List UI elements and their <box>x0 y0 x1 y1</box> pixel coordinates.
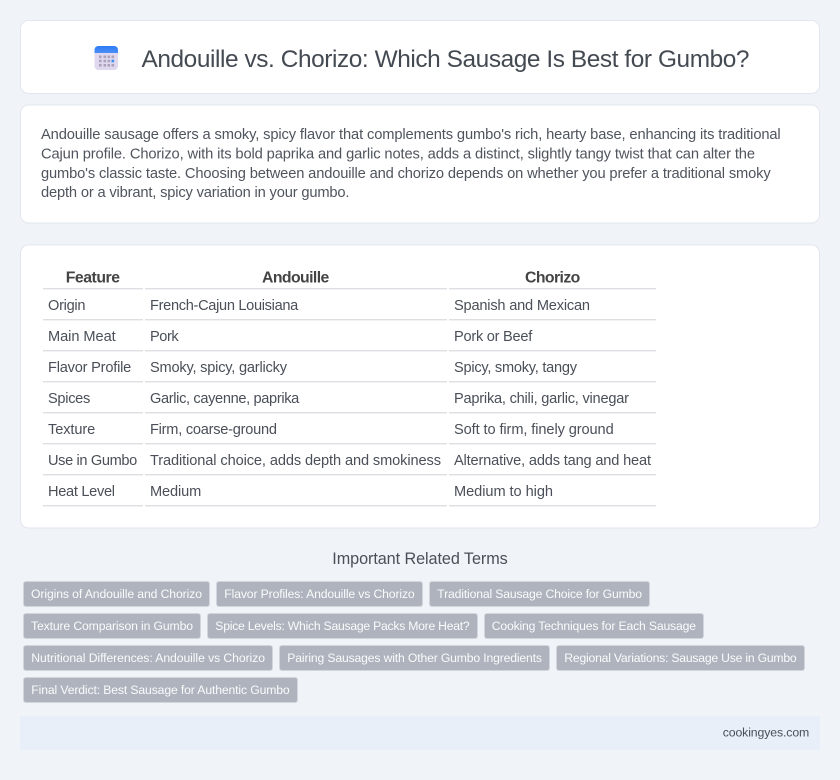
tag: Final Verdict: Best Sausage for Authentic Gumbo <box>31 683 290 697</box>
row: texture: Firm, coarse-ground <box>150 422 277 438</box>
icon: calendar <box>94 46 118 70</box>
tag: Origins of Andouille and Chorizo <box>31 587 202 601</box>
panel: comparison table <box>20 245 820 528</box>
heading: important related terms: Important Related Terms <box>332 550 508 568</box>
row: spices: Garlic, cayenne, paprika <box>150 391 300 407</box>
footer <box>20 716 820 750</box>
tag <box>24 678 298 702</box>
row: heat level <box>43 484 656 506</box>
row: spices: Spices <box>48 391 90 407</box>
footer source text: cookingyes.com <box>723 726 809 740</box>
panel: intro <box>20 105 820 223</box>
row: main meat: Pork <box>150 329 179 345</box>
row: texture <box>43 422 656 444</box>
tag <box>216 582 422 606</box>
tag <box>24 614 200 638</box>
tag: Nutritional Differences: Andouille vs Chorizo <box>31 651 265 665</box>
row: use in gumbo: Alternative, adds tang and heat <box>454 453 651 469</box>
tag <box>208 614 478 638</box>
table header row: Chorizo <box>525 270 581 286</box>
table header row: Andouille <box>262 270 330 286</box>
row: texture: Texture <box>48 422 95 438</box>
row: origin: Spanish and Mexican <box>454 298 590 314</box>
tag: Regional Variations: Sausage Use in Gumbo <box>564 651 797 665</box>
tag: Pairing Sausages with Other Gumbo Ingredients <box>287 651 542 665</box>
row: main meat: Main Meat <box>48 329 116 345</box>
intro paragraph <box>41 127 781 201</box>
tag <box>484 614 704 638</box>
row: flavor profile: Flavor Profile <box>48 360 131 376</box>
intro paragraph: Andouille sausage offers a smoky, spicy flavor that complements gumbo's rich, hearty base, enhancing its traditional <box>41 127 781 143</box>
row: main meat <box>43 329 656 351</box>
row: flavor profile <box>43 360 656 382</box>
row: use in gumbo: Traditional choice, adds depth and smokiness <box>150 453 441 469</box>
tag <box>556 646 804 670</box>
panel: related term tags <box>24 582 804 702</box>
tag: Traditional Sausage Choice for Gumbo <box>437 587 642 601</box>
tag <box>280 646 550 670</box>
row: main meat: Pork or Beef <box>454 329 533 345</box>
tag: Spice Levels: Which Sausage Packs More Heat? <box>215 619 470 633</box>
tag: Texture Comparison in Gumbo <box>31 619 193 633</box>
intro paragraph: Cajun profile. Chorizo, with its bold paprika and garlic notes, adds a distinct, slightly tangy twist that can alter the <box>41 146 755 162</box>
row: heat level: Medium <box>150 484 201 500</box>
row: texture: Soft to firm, finely ground <box>454 422 614 438</box>
intro paragraph: gumbo's classic taste. Choosing between andouille and chorizo depends on whether you prefer a traditional smoky <box>41 166 771 182</box>
row: origin: French-Cajun Louisiana <box>150 298 299 314</box>
tag <box>24 646 272 670</box>
intro paragraph: depth or a vibrant, spicy variation in your gumbo. <box>41 185 350 201</box>
row: use in gumbo <box>43 453 656 475</box>
row: heat level: Medium to high <box>454 484 553 500</box>
row: use in gumbo: Use in Gumbo <box>48 453 137 469</box>
row: flavor profile: Spicy, smoky, tangy <box>454 360 578 376</box>
tag: Cooking Techniques for Each Sausage <box>492 619 696 633</box>
title: Andouille vs. Chorizo: Which Sausage Is Best for Gumbo? <box>142 46 750 73</box>
row: origin: Origin <box>48 298 86 314</box>
row: spices: Paprika, chili, garlic, vinegar <box>454 391 629 407</box>
panel: header <box>20 20 820 94</box>
row: heat level: Heat Level <box>48 484 115 500</box>
tag <box>430 582 650 606</box>
tag: Flavor Profiles: Andouille vs Chorizo <box>224 587 415 601</box>
row: spices <box>43 391 656 413</box>
tag <box>24 582 210 606</box>
table header row: Feature <box>66 270 120 286</box>
table header row <box>43 270 656 289</box>
row: flavor profile: Smoky, spicy, garlicky <box>150 360 288 376</box>
row: origin <box>43 298 656 320</box>
